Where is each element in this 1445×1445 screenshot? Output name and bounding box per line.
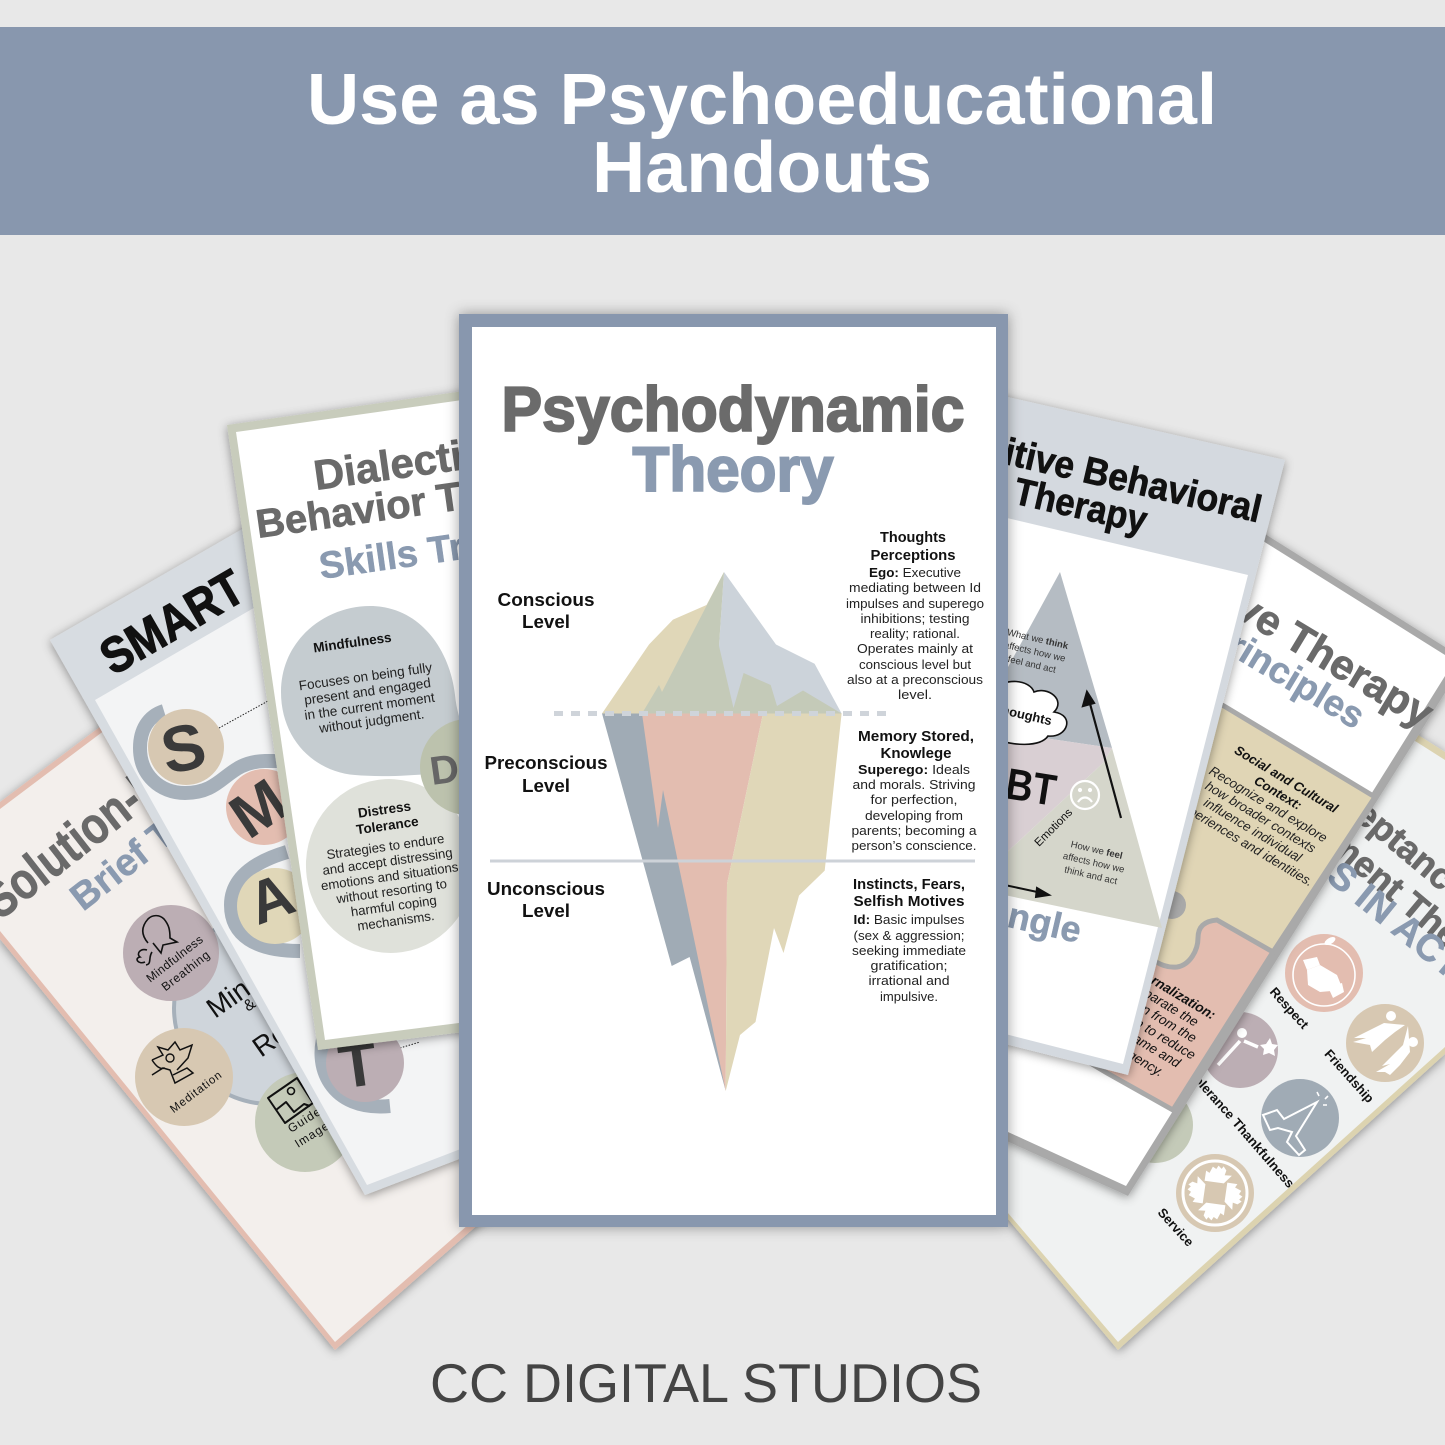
ego text: Thoughts [880, 529, 946, 546]
value labels: Thankfulness [1229, 1115, 1298, 1191]
mindfulness blob: present and engaged [303, 675, 432, 708]
ego text: Ego: Executive [869, 565, 961, 580]
superego text: Memory Stored, [858, 728, 974, 745]
value labels: Service [1155, 1205, 1197, 1249]
social and cultural context puzzle piece: Context: [1252, 773, 1305, 813]
letter D circle: D [427, 746, 462, 794]
iceberg [602, 572, 842, 1091]
id text: Selfish Motives [854, 893, 964, 910]
unconscious level label [487, 878, 605, 921]
letter A: A [239, 860, 303, 938]
gratitude sage icon [1117, 1087, 1193, 1163]
id text: irrational and [868, 973, 950, 988]
distress tolerance blob: Tolerance [355, 814, 420, 837]
social and cultural context puzzle piece: experiences and identities. [1174, 796, 1316, 889]
feel text [1059, 838, 1128, 888]
value labels: Respect [1267, 984, 1312, 1032]
guided imagery circle [255, 1072, 355, 1172]
dbt title: Dialectical [311, 423, 523, 499]
distress tolerance blob: emotions and situations [320, 859, 460, 893]
cbt triangle [990, 572, 1162, 928]
externalization puzzle piece: Externalization: [1124, 958, 1218, 1023]
feel text: affects how we [1062, 851, 1125, 876]
feel text: think and act [1063, 864, 1119, 887]
ego text: Operates mainly at [857, 641, 973, 656]
superego text: Knowlege [880, 745, 952, 762]
mindfulness blob: Focuses on being fully [298, 660, 433, 693]
id text [852, 876, 966, 1004]
distress tolerance blob: Strategies to endure [326, 831, 445, 862]
externalization puzzle piece: agency. [1119, 1043, 1166, 1080]
superego text: Superego: Ideals [858, 762, 971, 777]
id text: gratification; [870, 958, 948, 973]
letter T [326, 1024, 404, 1102]
tolerance icon [1202, 1012, 1278, 1088]
mindfulness blob: in the current moment [303, 690, 436, 723]
title: Handouts [592, 128, 932, 208]
id text: Instincts, Fears, [853, 876, 965, 893]
conscious level label [498, 589, 594, 632]
distress tolerance blob: Distress [357, 798, 412, 821]
think text [1000, 627, 1070, 677]
guided imagery circle: Imagery [292, 1112, 342, 1151]
ego text: Perceptions [870, 547, 956, 564]
social and cultural context puzzle piece: how broader contexts [1203, 778, 1319, 856]
id text: Id: Basic impulses [854, 912, 965, 927]
letter T: T [335, 1029, 382, 1102]
cloud thoughts: Thoughts [992, 700, 1053, 728]
cbt letters: BT [1002, 759, 1060, 816]
letter S: S [155, 708, 212, 788]
superego text: parents; becoming a [852, 823, 977, 838]
center subtitle: Theory [632, 435, 834, 505]
card: Cognitive Behavioral Therapy triangle [912, 393, 1285, 1075]
externalization puzzle piece: Separate the [1127, 977, 1201, 1030]
distress tolerance blob [295, 768, 485, 964]
mindfulness blob: Mindfulness [312, 630, 392, 655]
mindfulness blob [281, 606, 490, 776]
value labels: Tolerance [1186, 1067, 1238, 1122]
ego text: reality; rational. [870, 626, 960, 641]
superego text: person’s conscience. [852, 838, 976, 853]
emotions label: Emotions [1033, 807, 1075, 849]
externalization puzzle piece [1060, 920, 1273, 1110]
unconscious level label: Unconscious [487, 878, 605, 899]
unconscious level label: Level [522, 900, 570, 921]
externalization puzzle piece: person from the [1110, 984, 1199, 1046]
superego text: for perfection, [870, 792, 958, 807]
value labels: Friendship [1322, 1046, 1377, 1106]
cbt title: Cognitive Behavioral [912, 411, 1265, 531]
letter D circle [420, 719, 516, 815]
letter M: M [218, 766, 299, 852]
superego text: developing from [865, 808, 963, 823]
sad face icon [1071, 781, 1099, 809]
cbt triangle subtitle: Triangle [942, 880, 1085, 951]
feel text: How we feel [1070, 839, 1124, 862]
think text: affects how we [1003, 640, 1066, 665]
meditation circle [135, 1028, 233, 1126]
id text: seeking immediate [852, 943, 966, 958]
central relaxation circle [174, 912, 373, 1104]
card: Dialectical Behavior Therapy [227, 380, 640, 1050]
central relaxation circle: Mindfulness [201, 913, 341, 1024]
solution card subtitle: Brief Therapy [63, 735, 282, 919]
conscious level label: Level [522, 611, 570, 632]
distress tolerance blob: and accept distressing [321, 845, 453, 878]
ego text: impulses and superego [846, 596, 984, 611]
footer brand: CC DIGITAL STUDIOS [430, 1352, 982, 1414]
respect icon [1285, 934, 1363, 1012]
ribbon connecting letters [140, 711, 390, 1107]
distress tolerance blob: mechanisms. [356, 908, 435, 934]
id text: (sex & aggression; [854, 928, 964, 943]
conscious level label: Conscious [498, 589, 594, 610]
mindfulness blob: without judgment. [317, 706, 425, 736]
narrative title: Narrative Therapy [1111, 512, 1442, 737]
smart title: SMART [90, 559, 254, 686]
distress tolerance blob: without resorting to [334, 876, 448, 906]
ego text: level. [898, 687, 932, 702]
center card: Psychodynamic Theory [459, 314, 1008, 1227]
social and cultural context puzzle piece: Recognize and explore [1207, 763, 1330, 845]
ego text [846, 529, 984, 702]
service icon [1176, 1154, 1254, 1232]
central relaxation circle: & [241, 995, 259, 1015]
preconscious level label: Preconscious [484, 752, 608, 773]
mindfulness breathing circle: Breathing [159, 948, 212, 994]
dotted leader S [219, 701, 268, 728]
dbt title line 2: Behavior Therapy [253, 456, 595, 547]
preconscious level label: Level [522, 775, 570, 796]
think text: feel and act [1007, 654, 1057, 676]
dbt subtitle: Skills Training [316, 510, 577, 588]
guided imagery circle: Guided [285, 1100, 331, 1136]
thankfulness icon [1261, 1079, 1339, 1157]
social and cultural context puzzle piece: Social and Cultural [1232, 742, 1341, 816]
id text: impulsive. [880, 989, 938, 1004]
distress tolerance blob: harmful coping [350, 893, 438, 919]
mindfulness breathing circle [123, 905, 219, 1001]
meditation circle: Meditation [168, 1069, 224, 1116]
title [307, 60, 1217, 208]
header banner [0, 27, 1445, 235]
think text: What we think [1006, 627, 1070, 652]
central relaxation circle: Relaxation [247, 962, 373, 1063]
dotted leader T [400, 1042, 420, 1048]
card: SMART Goals [50, 415, 640, 1195]
cloud thoughts [990, 681, 1067, 744]
preconscious divider [490, 860, 975, 862]
ego text: mediating between Id [849, 580, 981, 595]
ego text: also at a preconscious [847, 672, 984, 687]
superego text: and morals. Striving [852, 777, 976, 792]
waterline dashed [554, 711, 894, 716]
arrow up [1083, 692, 1121, 818]
preconscious level label [484, 752, 608, 796]
social and cultural context puzzle piece [1090, 650, 1375, 985]
value labels [1155, 984, 1377, 1249]
title: Use as Psychoeducational [307, 60, 1217, 140]
externalization puzzle piece: shame and [1118, 1023, 1184, 1071]
card: Acceptance and Commitment Therapy [950, 660, 1445, 1350]
mindfulness breathing circle: Mindfulness [143, 932, 206, 985]
center title: Psychodynamic [502, 375, 964, 445]
arrow right [1000, 884, 1049, 897]
externalization puzzle piece: problem to reduce [1096, 993, 1198, 1063]
social and cultural context puzzle piece: influence individual [1201, 795, 1305, 866]
friendship icon [1346, 1004, 1424, 1082]
ego text: inhibitions; testing [860, 611, 970, 626]
narrative subtitle: Principles [1199, 611, 1372, 737]
card: Solution-Focused Brief Therapy [0, 340, 620, 1350]
ego text: conscious level but [859, 657, 971, 672]
card: Narrative Therapy principles [960, 400, 1445, 1196]
superego text [852, 728, 977, 853]
cbt title line 2: Therapy [1010, 471, 1151, 542]
